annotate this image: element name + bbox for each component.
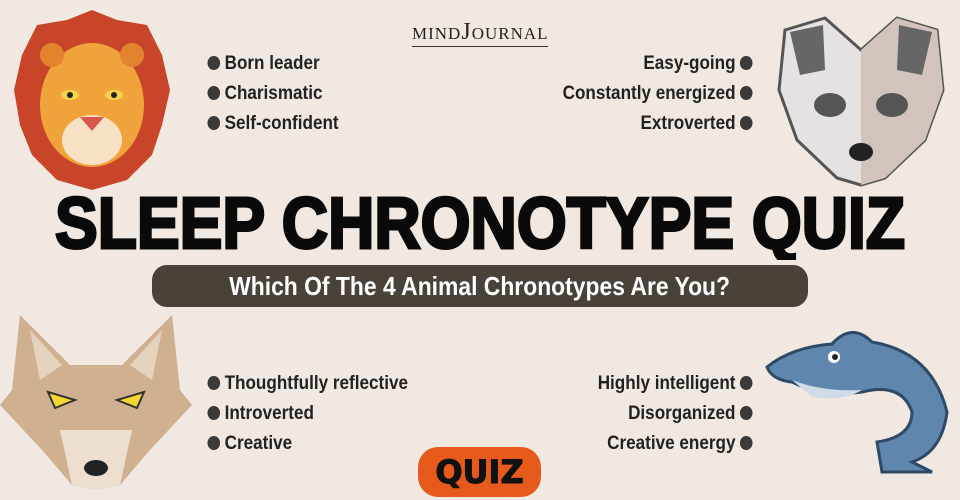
list: lion traits: Born leader — [225, 53, 320, 74]
quiz button: QUIZ — [435, 453, 524, 491]
list: lion traits: Self-confident — [225, 113, 339, 134]
list: dolphin traits: Disorganized — [628, 403, 735, 424]
list: bear traits — [562, 53, 752, 134]
quiz button — [418, 447, 541, 497]
list: lion traits: Charismatic — [225, 83, 323, 104]
subtitle pill: Which Of The 4 Animal Chronotypes Are You? — [230, 271, 730, 301]
list: dolphin traits: Highly intelligent — [598, 373, 735, 394]
list: bear traits: Easy-going — [643, 53, 735, 74]
list: bear traits: Extroverted — [640, 113, 735, 134]
subtitle pill — [152, 265, 808, 307]
icon: dolphin — [765, 331, 948, 474]
list: wolf traits — [208, 373, 408, 454]
list: wolf traits: Introverted — [225, 403, 314, 424]
list: wolf traits: Creative — [225, 433, 292, 454]
icon: wolf — [0, 315, 192, 490]
list: wolf traits: Thoughtfully reflective — [225, 373, 408, 394]
icon: lion — [14, 10, 170, 190]
list: dolphin traits: Creative energy — [607, 433, 735, 454]
list: bear traits: Constantly energized — [562, 83, 735, 104]
icon: fox — [778, 16, 944, 187]
logo: MINDJOURNAL — [412, 19, 549, 45]
list: dolphin traits — [598, 373, 752, 454]
list: lion traits — [208, 53, 339, 134]
